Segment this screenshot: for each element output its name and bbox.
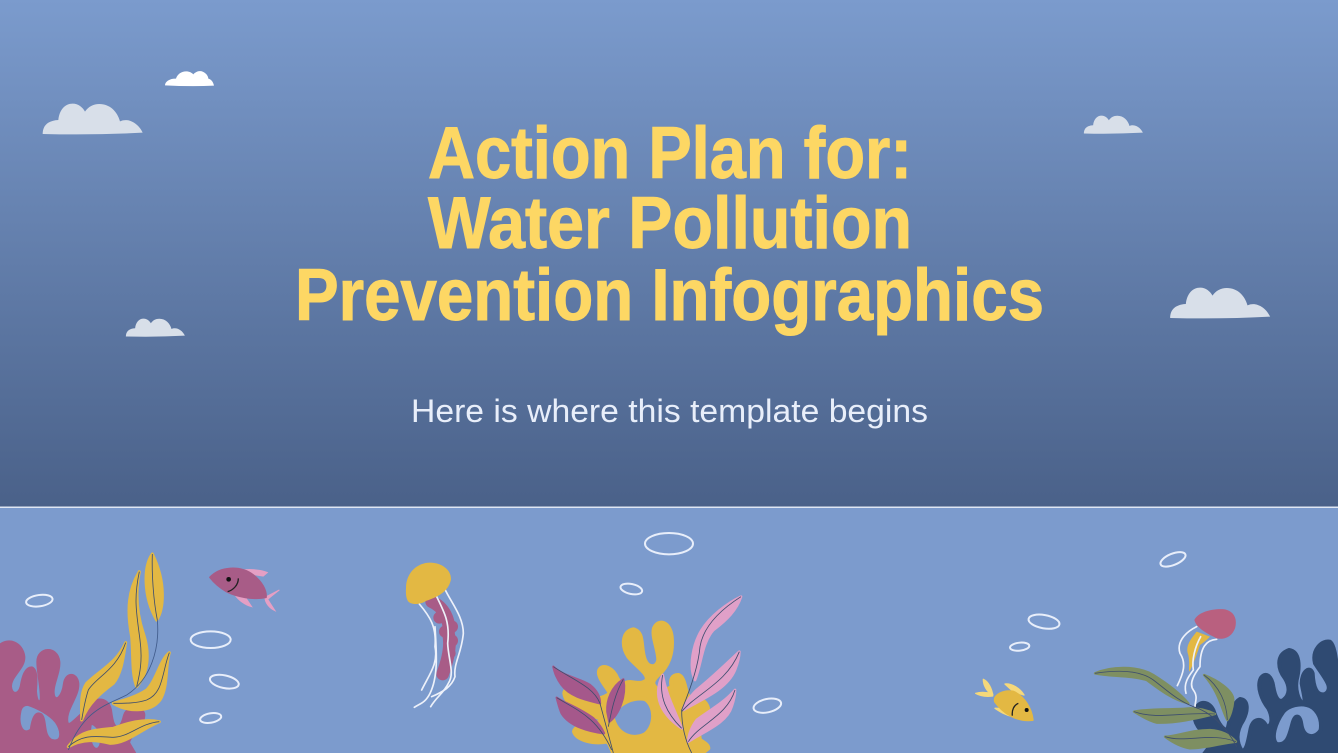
jellyfish: yellow <box>406 563 463 707</box>
yellow coral <box>564 623 708 753</box>
illustration: left seabed group <box>0 554 279 753</box>
icon: cloud top right <box>1084 116 1143 134</box>
bubbles <box>1010 549 1187 652</box>
bubbles <box>620 533 782 715</box>
fish: yellow <box>976 679 1033 720</box>
yellow seaweed <box>68 554 169 747</box>
dark blue coral <box>1194 641 1338 753</box>
panel: sky background <box>0 0 1338 507</box>
jellyfish: pink <box>1177 609 1236 707</box>
pink coral <box>0 642 143 753</box>
title: Water Pollution <box>428 183 912 264</box>
fish: pink <box>210 568 279 611</box>
illustration: right seabed group <box>976 549 1338 753</box>
icon: large cloud right <box>1170 288 1270 318</box>
icon: small white cloud <box>165 71 214 86</box>
purple seaweed <box>553 667 624 753</box>
icon: cloud lower left <box>126 319 185 337</box>
title: Action Plan for: <box>428 113 912 194</box>
title <box>295 113 1044 336</box>
pink seaweed <box>658 597 741 753</box>
subtitle: Here is where this template begins <box>411 393 928 429</box>
bubbles <box>25 593 240 724</box>
seaweed stems <box>68 554 169 750</box>
icon: large cloud top left <box>43 104 143 134</box>
water surface line <box>0 506 1338 508</box>
panel: sea background <box>0 507 1338 753</box>
title: Prevention Infographics <box>295 255 1044 336</box>
green seaweed <box>1095 668 1237 748</box>
illustration: centre jellyfish and coral group <box>406 533 782 753</box>
